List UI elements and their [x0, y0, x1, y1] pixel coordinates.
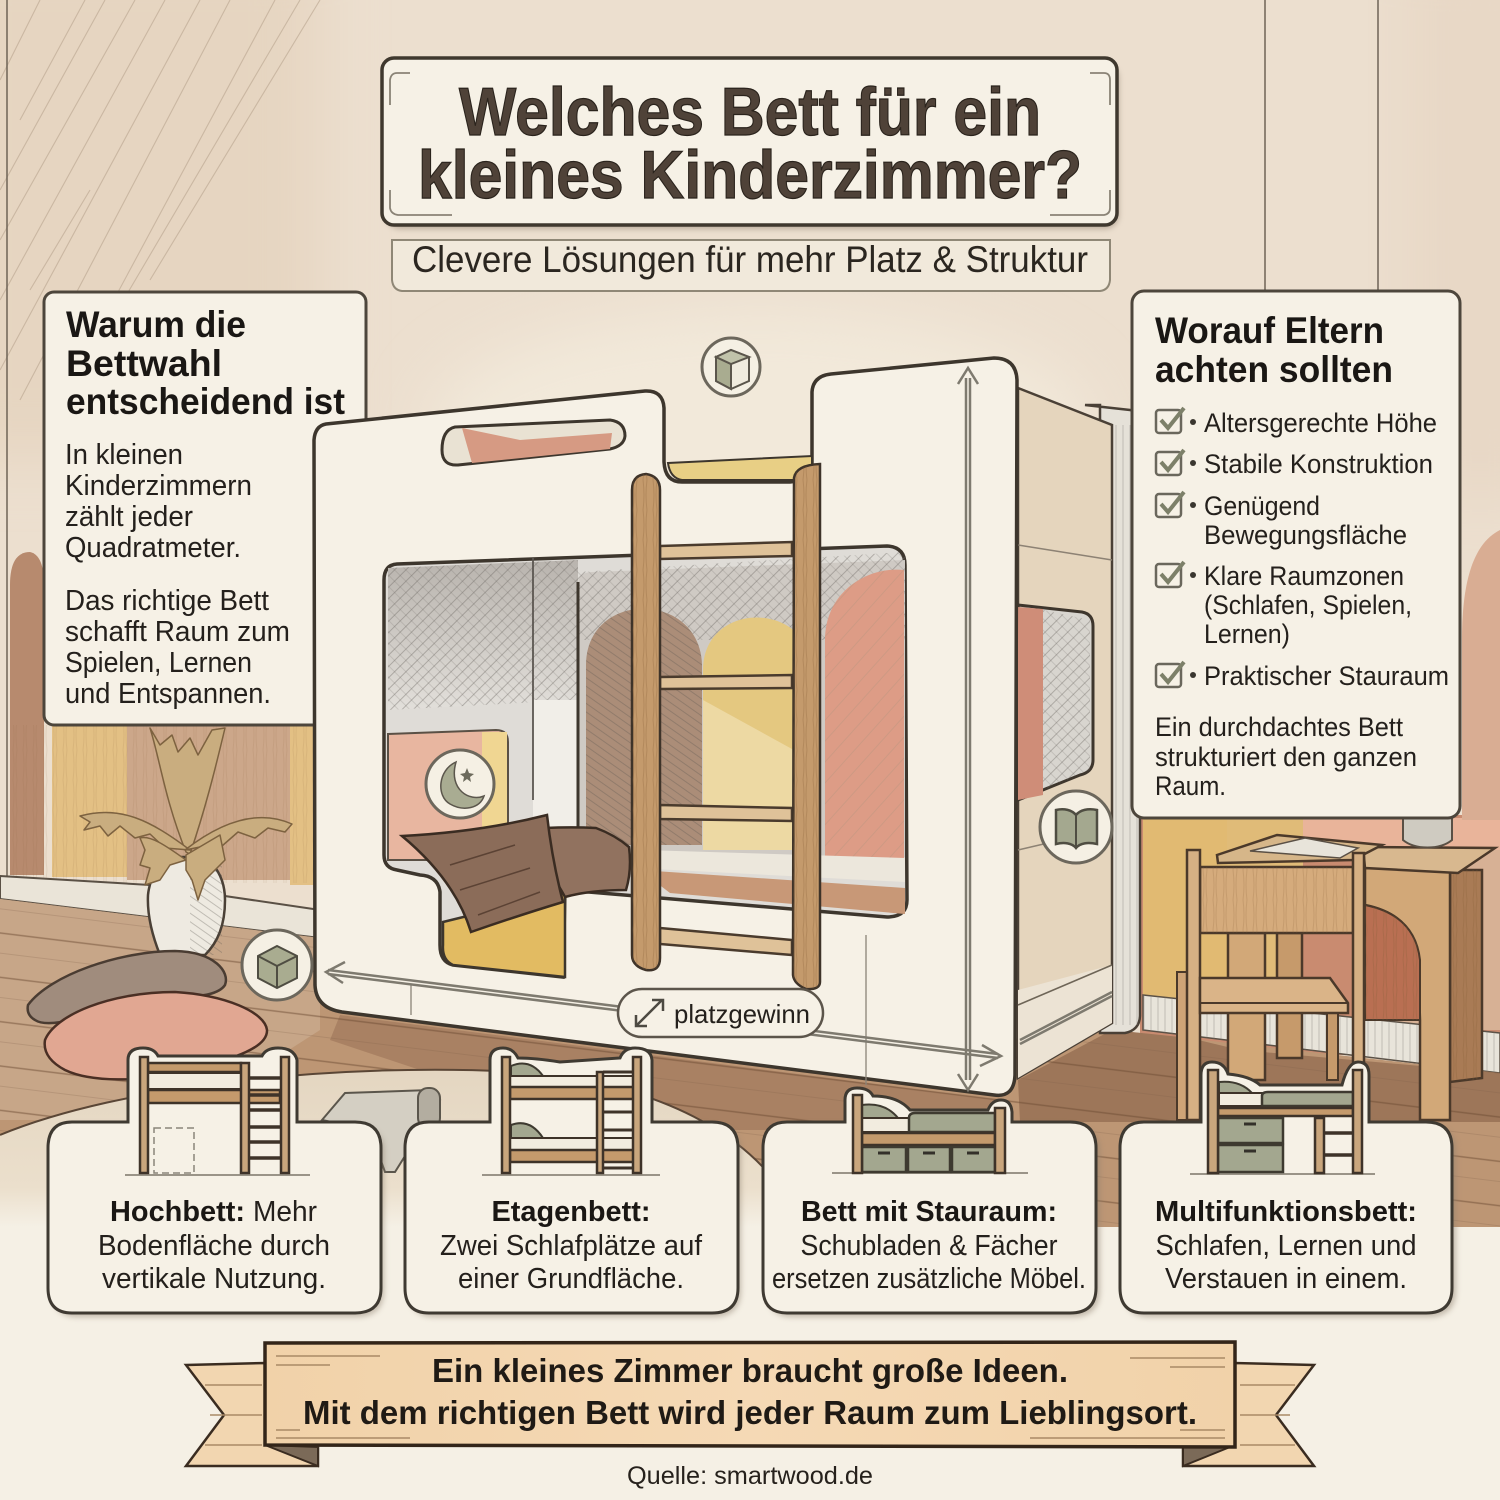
bed side and back panel — [1018, 388, 1140, 1078]
source: Quelle: smartwood.de — [627, 1462, 873, 1490]
side window — [1018, 605, 1093, 800]
card: Bett mit Stauraum — [763, 1088, 1100, 1317]
body text: Kinderzimmern — [65, 470, 252, 502]
left wainscot colours — [0, 552, 320, 938]
subtitle panel: Clevere Lösungen für mehr Platz & Struktur — [412, 239, 1088, 280]
icon: loft bed — [125, 1057, 310, 1175]
title panel — [382, 58, 1119, 229]
body text: und Entspannen. — [65, 678, 271, 710]
icon: bunk bed — [482, 1057, 660, 1175]
caption: Mehr — [253, 1196, 317, 1228]
body text: zählt jeder — [65, 501, 193, 533]
caption — [440, 1196, 703, 1295]
checklist: Klare Raumzonen — [1204, 561, 1404, 591]
top slot — [442, 420, 625, 465]
heading: Worauf Eltern — [1155, 310, 1384, 351]
right wainscot colours — [1140, 530, 1500, 1073]
plant in vase — [80, 728, 292, 955]
heading: entscheidend ist — [66, 381, 345, 422]
caption: ersetzen zusätzliche Möbel. — [772, 1263, 1086, 1295]
heading: Warum die — [66, 304, 246, 345]
banner text — [303, 1352, 1197, 1431]
book on rug — [322, 1088, 440, 1172]
pill: platzgewinn: platzgewinn — [674, 999, 810, 1029]
caption — [1155, 1196, 1417, 1295]
heading — [66, 304, 345, 422]
banner ribbon — [186, 1342, 1314, 1466]
banner text: Ein kleines Zimmer braucht große Ideen. — [432, 1352, 1068, 1389]
mattress — [443, 892, 565, 977]
closing note — [1155, 712, 1417, 801]
lamp — [1403, 815, 1452, 848]
closing note: Ein durchdachtes Bett — [1155, 712, 1403, 742]
caption: Etagenbett: — [492, 1196, 650, 1228]
body text: schafft Raum zum — [65, 616, 290, 648]
caption: Schlafen, Lernen und — [1156, 1230, 1416, 1262]
card: Hochbett — [48, 1048, 384, 1317]
measure arrows — [326, 368, 1112, 1090]
caption: Verstauen in einem. — [1165, 1263, 1407, 1295]
checklist — [1156, 408, 1449, 691]
caption — [772, 1196, 1086, 1295]
icon: book — [1040, 791, 1112, 863]
caption: vertikale Nutzung. — [102, 1263, 326, 1295]
checklist: Lernen) — [1204, 619, 1290, 649]
body text: Spielen, Lernen — [65, 647, 252, 679]
title panel: kleines Kinderzimmer? — [418, 137, 1082, 213]
body text — [65, 439, 290, 710]
title: Welches Bett für ein — [459, 74, 1041, 150]
desk — [1217, 815, 1495, 1120]
checklist: (Schlafen, Spielen, — [1204, 590, 1412, 620]
caption: Bodenfläche durch — [98, 1230, 330, 1262]
cushions — [28, 951, 267, 1079]
pillow 1 — [402, 815, 563, 932]
body text: Das richtige Bett — [65, 585, 269, 617]
caption: Schubladen & Fächer — [800, 1230, 1058, 1262]
ladder — [632, 464, 820, 989]
caption: Hochbett: — [110, 1196, 245, 1228]
opening — [384, 546, 907, 977]
caption: Bett mit Stauraum: — [801, 1196, 1057, 1228]
chair — [1177, 850, 1364, 1120]
pillow 2 — [517, 827, 630, 897]
icon: multifunction bed — [1190, 1070, 1375, 1174]
floor — [0, 899, 1500, 1227]
heading: achten sollten — [1155, 349, 1393, 390]
yellow bedding in notch — [668, 456, 812, 480]
caption: Multifunktionsbett: — [1155, 1196, 1417, 1228]
icon: cube left — [242, 930, 312, 1000]
caption — [98, 1196, 330, 1295]
pill: platzgewinn — [618, 989, 823, 1037]
closing note: Raum. — [1155, 771, 1226, 801]
rug — [0, 1070, 800, 1227]
checklist: Bewegungsfläche — [1204, 520, 1407, 550]
card: Multifunktionsbett — [1120, 1062, 1456, 1317]
pink headboard — [388, 730, 508, 860]
banner text: Mit dem richtigen Bett wird jeder Raum zum Lieblingsort. — [303, 1394, 1197, 1431]
body text: Quadratmeter. — [65, 532, 241, 564]
checklist: Genügend — [1204, 491, 1320, 521]
tray with paper — [1217, 835, 1382, 863]
panel: warum die Bettwahl — [44, 292, 366, 725]
caption: einer Grundfläche. — [458, 1263, 684, 1295]
card: Etagenbett — [405, 1048, 741, 1317]
heading: Bettwahl — [66, 343, 222, 384]
heading — [1155, 310, 1393, 390]
checklist: Altersgerechte Höhe — [1204, 408, 1437, 438]
caption: Zwei Schlafplätze auf — [440, 1230, 703, 1262]
icon: storage bed — [832, 1095, 1028, 1173]
checklist: Stabile Konstruktion — [1204, 449, 1433, 479]
checklist: Praktischer Stauraum — [1204, 661, 1449, 691]
icon: moon — [426, 750, 494, 818]
bed front panel — [314, 358, 1017, 1095]
icon: box top — [702, 338, 760, 396]
body text: In kleinen — [65, 439, 183, 471]
panel: worauf Eltern achten — [1132, 291, 1460, 818]
closing note: strukturiert den ganzen — [1155, 742, 1417, 772]
